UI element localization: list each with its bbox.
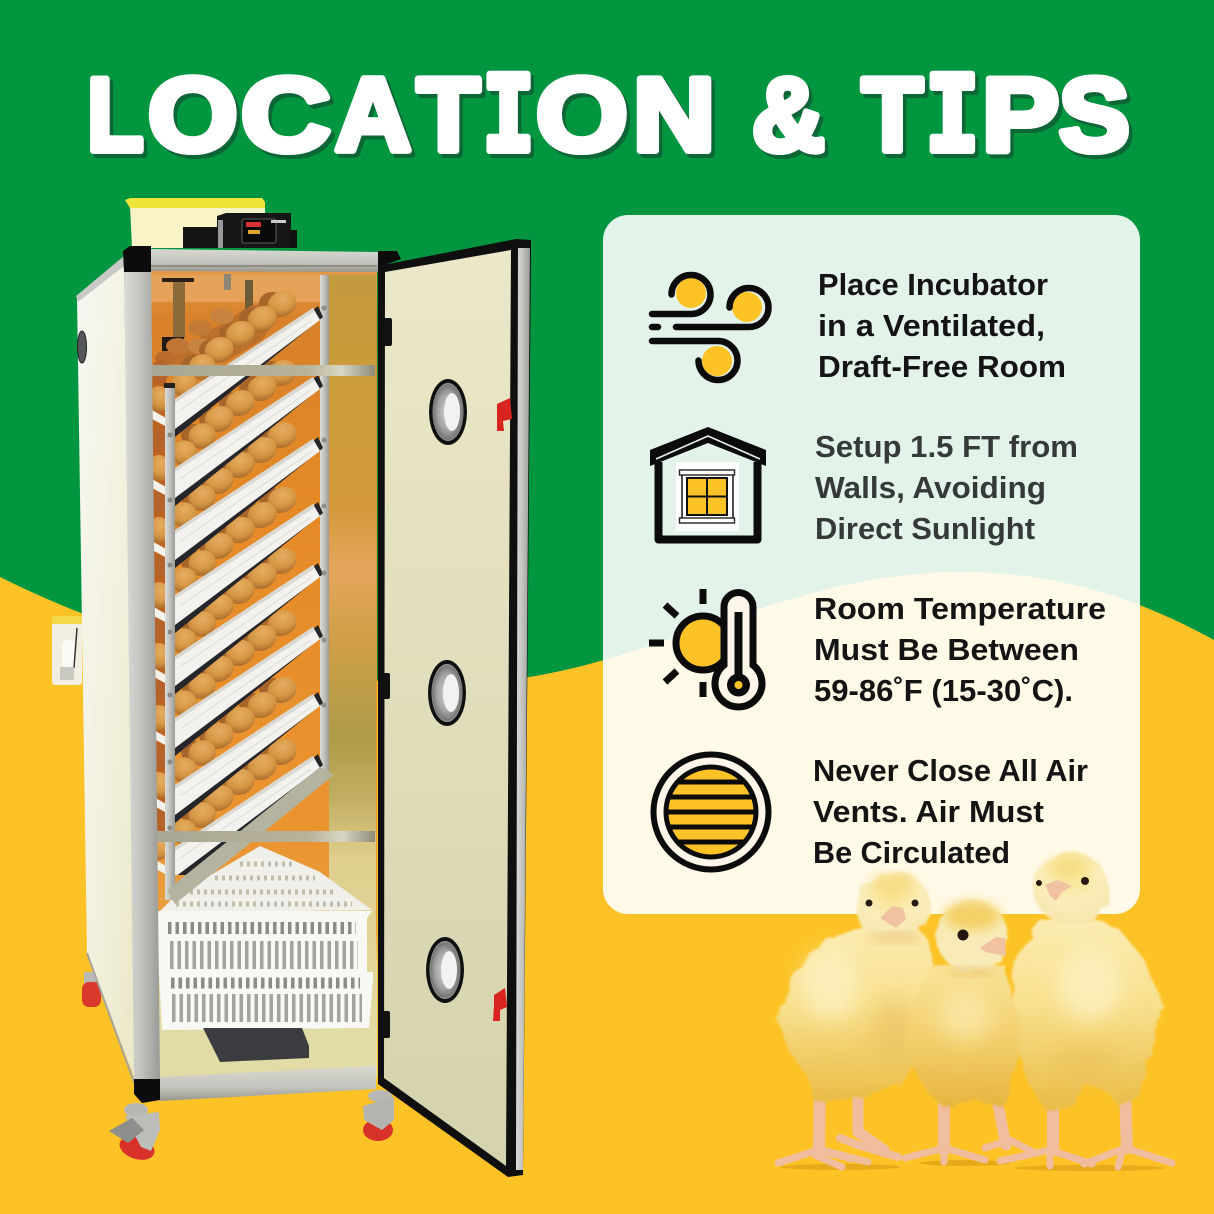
lower plastic crate — [159, 972, 373, 1030]
tip text: distance from walls: Direct Sunlight — [815, 511, 1035, 546]
lower cross bar — [156, 831, 375, 842]
controller box — [183, 213, 297, 248]
tip text: room temperature: Must Be Between — [814, 632, 1079, 667]
tip text: ventilated room — [818, 267, 1066, 384]
title: O — [536, 58, 628, 174]
tip text: room temperature: Room Temperature — [814, 591, 1106, 626]
title: T — [417, 58, 480, 174]
tip text: air vents: Vents. Air Must — [813, 794, 1044, 829]
left rack post — [165, 384, 175, 900]
chick left — [778, 872, 937, 1167]
panel: tips card — [603, 215, 1140, 914]
tip text: air vents — [813, 753, 1088, 870]
icon: wind — [652, 275, 768, 380]
title: P — [982, 58, 1059, 174]
title: I — [482, 54, 535, 176]
title: L — [87, 58, 143, 174]
porthole top — [429, 379, 467, 445]
back egg rows — [155, 298, 290, 365]
front left caster — [109, 1103, 160, 1164]
yellow wave background — [0, 572, 1214, 1214]
door hinges — [384, 318, 392, 346]
egg trays — [148, 286, 323, 885]
water container on top — [125, 198, 265, 248]
front right caster — [363, 1090, 394, 1141]
ground shadows — [780, 1160, 1165, 1171]
upper cross bar — [152, 365, 375, 376]
tip text: ventilated room: Place Incubator — [818, 267, 1048, 302]
interior back wall — [151, 270, 377, 1078]
tip text: ventilated room: in a Ventilated, — [818, 308, 1045, 343]
side wall — [77, 258, 135, 1080]
title: I — [925, 54, 980, 176]
side vent — [78, 331, 86, 363]
red valve upper — [497, 398, 512, 431]
centre post bolts — [322, 306, 326, 708]
chick middle — [903, 900, 1033, 1162]
centre post — [320, 275, 329, 775]
tip text: room temperature — [814, 591, 1106, 708]
upper plastic crate — [158, 846, 372, 975]
tip text: ventilated room: Draft-Free Room — [818, 349, 1066, 384]
tip text: air vents: Never Close All Air — [813, 753, 1088, 788]
title: S — [1059, 58, 1130, 174]
porthole bottom — [426, 937, 464, 1003]
incubator — [52, 198, 531, 1177]
lower floor — [160, 1030, 376, 1077]
door — [378, 239, 531, 1177]
diagonal brace — [167, 767, 334, 904]
chick right — [1000, 852, 1172, 1167]
title: C — [241, 58, 330, 174]
top frame — [151, 249, 378, 272]
icon: house with window — [650, 427, 766, 540]
tip text: distance from walls: Setup 1.5 FT from — [815, 429, 1078, 464]
icon: air vent — [654, 754, 768, 870]
title: & — [752, 58, 824, 174]
porthole middle — [428, 660, 466, 726]
black bottom corner — [134, 1079, 160, 1103]
chicks — [778, 852, 1172, 1171]
tip text: distance from walls: Walls, Avoiding — [815, 470, 1046, 505]
tip text: distance from walls — [815, 429, 1078, 546]
glass side wall — [329, 275, 376, 1045]
red valve lower — [493, 988, 507, 1021]
icon: sun and thermometer — [649, 589, 762, 707]
water bottle on side — [52, 616, 89, 685]
title: O — [148, 58, 238, 174]
black drip tray — [203, 1028, 309, 1062]
front left post — [124, 262, 160, 1080]
title: N — [633, 58, 715, 174]
top mechanism — [162, 274, 253, 351]
title: T — [862, 58, 923, 174]
title: A — [335, 58, 411, 174]
rack post bolts — [168, 432, 172, 830]
rear caster — [82, 972, 101, 1007]
tip text: room temperature: 59-86˚F (15-30˚C). — [814, 673, 1073, 708]
floor frame — [160, 1066, 376, 1101]
black top corners — [123, 246, 151, 272]
tip text: air vents: Be Circulated — [813, 835, 1010, 870]
